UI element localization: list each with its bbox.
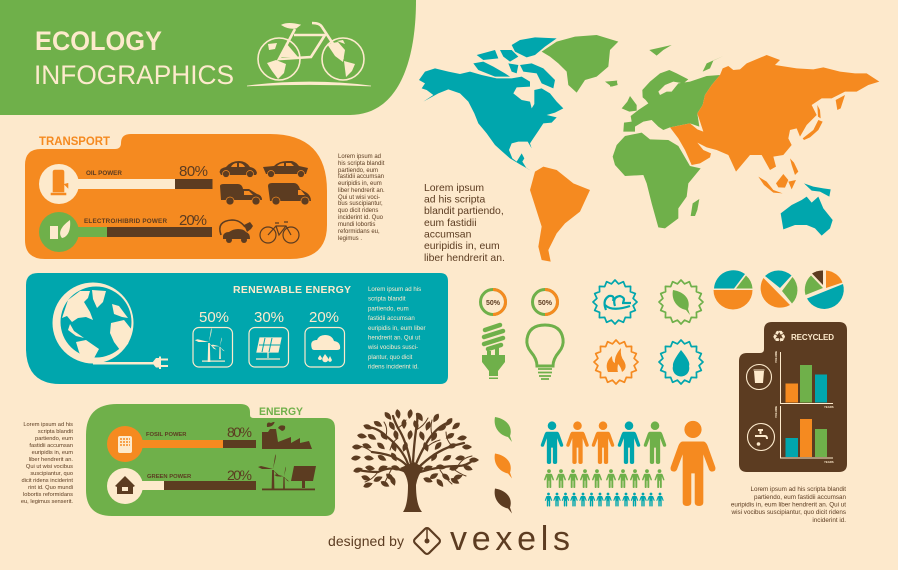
stat: rain 20% (305, 309, 344, 367)
text block: recycled: Lorem ipsum ad his scripta blandit (750, 486, 846, 493)
text block: renewable energy: partiendo, eum (368, 306, 409, 312)
fosil power bar (107, 424, 256, 462)
text block: energy: liber hendrerit an. (29, 457, 73, 463)
text block: renewable energy: wisi vocibus susci- (367, 344, 418, 351)
text block: energy: suscipiantur, quo (30, 471, 73, 477)
icon: green leaf (495, 417, 512, 442)
icon: factory (262, 422, 312, 449)
bar chart: bottom: YEARS (824, 460, 834, 464)
text block: transport: Qui ut wisi voci- (338, 195, 380, 201)
title (34, 26, 234, 90)
fosil power bar: 80% (227, 424, 252, 440)
south america (530, 167, 590, 262)
text block: map (424, 183, 505, 264)
icon: wind and solar (258, 454, 316, 490)
icon: globe with plug (52, 282, 168, 369)
text block: energy: scripta blandit (38, 429, 73, 435)
pie chart 2 (761, 271, 797, 308)
text block: renewable energy: hendrerit an. Qui ut (368, 334, 420, 342)
heading: recycled: RECYCLED (791, 333, 834, 342)
icon: tree (351, 409, 479, 512)
bulbs (480, 290, 563, 379)
text block: transport: fastidii accumsan (338, 174, 384, 180)
text block: map: Lorem ipsum (424, 183, 484, 194)
text block: transport: partiendo, eum (338, 168, 378, 174)
text block: energy: rint id. Quo mundi (28, 485, 73, 491)
text block: transport: Lorem ipsum ad (338, 154, 381, 160)
people: green row (544, 469, 664, 488)
text block: recycled: inciderint id. (812, 517, 846, 524)
text block: renewable energy: ridens inciderint id. (368, 364, 419, 370)
people: large orange person (670, 421, 716, 506)
text block: recycled: euripidis in, eum liber hendrerit an. Qui ut (731, 502, 846, 508)
text block: recycled: wisi vocibus suscipiantur, quo dicit ridens (731, 509, 846, 516)
text block: energy: lobortis reformidans (23, 492, 73, 498)
text block: transport: quo dicit ridens (338, 208, 378, 214)
stat: solar 30% (249, 309, 288, 367)
panel: renewable energy (26, 273, 448, 384)
header banner (0, 0, 416, 115)
text block: energy: Qui ut wisi vocibus (26, 464, 73, 470)
text block: energy (21, 422, 73, 505)
text block: map: eum fastidii (424, 218, 477, 229)
greenland and iceland (542, 35, 618, 93)
text block: transport: mundi lobortis (338, 222, 375, 228)
electro power bar (39, 212, 212, 252)
icon: bicycle with globe wheels (247, 23, 371, 86)
bar chart: bottom (774, 406, 834, 464)
text block: transport: reformidans eu, (338, 229, 380, 235)
text block: transport: legimus . (338, 236, 362, 242)
text block: renewable energy: plantur, quo dicit (368, 354, 413, 361)
oil power bar (39, 163, 212, 204)
text block: energy: dicit ridens inciderint (21, 478, 73, 484)
heading: energy: ENERGY (259, 406, 304, 418)
title: ECOLOGY (35, 26, 162, 56)
green power bar (107, 467, 256, 504)
text block: energy: Lorem ipsum ad his (23, 422, 73, 428)
bar chart: top (774, 351, 834, 409)
text block: map: blandit partiendo, (424, 206, 504, 217)
bar chart: bottom: VOLUME (774, 406, 778, 418)
electro power bar: ELECTRO/HIBRID POWER (84, 218, 167, 225)
text block: renewable energy (367, 286, 426, 370)
oil power bar: 80% (179, 163, 208, 180)
icon: water badge (659, 340, 703, 384)
icon: vexels logo (413, 527, 441, 555)
map: old world (610, 45, 879, 236)
panel: transport (25, 134, 327, 259)
text block: renewable energy: scripta blandit (368, 296, 406, 302)
people: teal row (545, 493, 664, 506)
stat: rain 20%: 20% (309, 309, 339, 326)
icons: vehicles (220, 161, 311, 243)
text block: transport: inciderint id. Quo (338, 215, 384, 221)
text block: map: ad his scripta (424, 194, 485, 206)
progress ring: 50% spiral bulb: 50% (486, 300, 501, 307)
europe and africa (610, 45, 723, 228)
text block: transport: euripidis in, eum (338, 181, 382, 187)
text block: map: euripidis in, eum (424, 241, 500, 252)
icon: spiral bulb (482, 325, 505, 379)
text block: transport: his scripta blandit (338, 161, 385, 167)
text block: energy: partiendo, eum (35, 436, 73, 442)
text block: map: liber hendrerit an. (424, 253, 505, 264)
title: INFOGRAPHICS (34, 60, 234, 90)
text block: recycled (731, 486, 846, 524)
people: large row (541, 421, 666, 464)
heading: recycled (772, 327, 834, 346)
icon: wind badge (593, 280, 637, 324)
icon: outline bulb (527, 325, 563, 379)
asia (670, 55, 879, 193)
icon: brown leaf (495, 488, 512, 514)
heading: transport: TRANSPORT (39, 134, 111, 148)
stat: wind 50% (193, 309, 232, 367)
pie chart 1 (714, 270, 752, 310)
icon: leaf badge (659, 280, 703, 324)
map: americas and greenland (419, 35, 618, 171)
text block: energy: euripidis in, eum (32, 450, 73, 456)
text block: renewable energy: Lorem ipsum ad his (368, 286, 421, 293)
bar chart: top: VOLUME (774, 351, 778, 363)
text block: transport: liber hendrerit an. (338, 188, 385, 194)
heading: recycled: ♻ (772, 327, 786, 346)
footer credit: designed by (328, 533, 404, 549)
world map (419, 35, 879, 262)
electro power bar: 20% (179, 212, 207, 229)
footer credit: vexels (450, 520, 570, 558)
text block: transport (338, 154, 385, 242)
text block: energy: eu, legimus senserit. (21, 499, 73, 505)
icon: recycle bin (746, 364, 772, 390)
fosil power bar: FOSIL POWER (146, 432, 187, 438)
stat: wind 50%: 50% (199, 309, 229, 326)
text block: renewable energy: fastidii accumsan (368, 315, 415, 322)
progress ring: 50% outline bulb: 50% (538, 300, 553, 307)
pie chart 3 (805, 270, 844, 309)
text block: transport: bus suscipiantur, (338, 201, 383, 207)
heading: renewable energy: RENEWABLE ENERGY (233, 284, 352, 296)
text block: recycled: partiendo, eum fastidii accumsan (754, 494, 846, 501)
green power bar: GREEN POWER (147, 474, 192, 480)
text block: map: accumsan (424, 230, 472, 240)
oil power bar: OIL POWER (86, 170, 122, 177)
oceania (781, 183, 833, 236)
icon: water tap (748, 424, 774, 450)
panel: recycled (739, 322, 847, 472)
bar chart: top: YEARS (824, 405, 834, 409)
green power bar: 20% (227, 467, 252, 483)
icon: orange leaf (495, 454, 512, 478)
footer credit (328, 520, 570, 558)
text block: renewable energy: euripidis in, eum liber (368, 325, 426, 332)
panel: energy (86, 404, 335, 516)
icon: flame badge (594, 340, 638, 384)
text block: energy: fastidii accumsan (29, 443, 73, 449)
stat: solar 30%: 30% (254, 309, 284, 326)
north america (419, 37, 563, 171)
